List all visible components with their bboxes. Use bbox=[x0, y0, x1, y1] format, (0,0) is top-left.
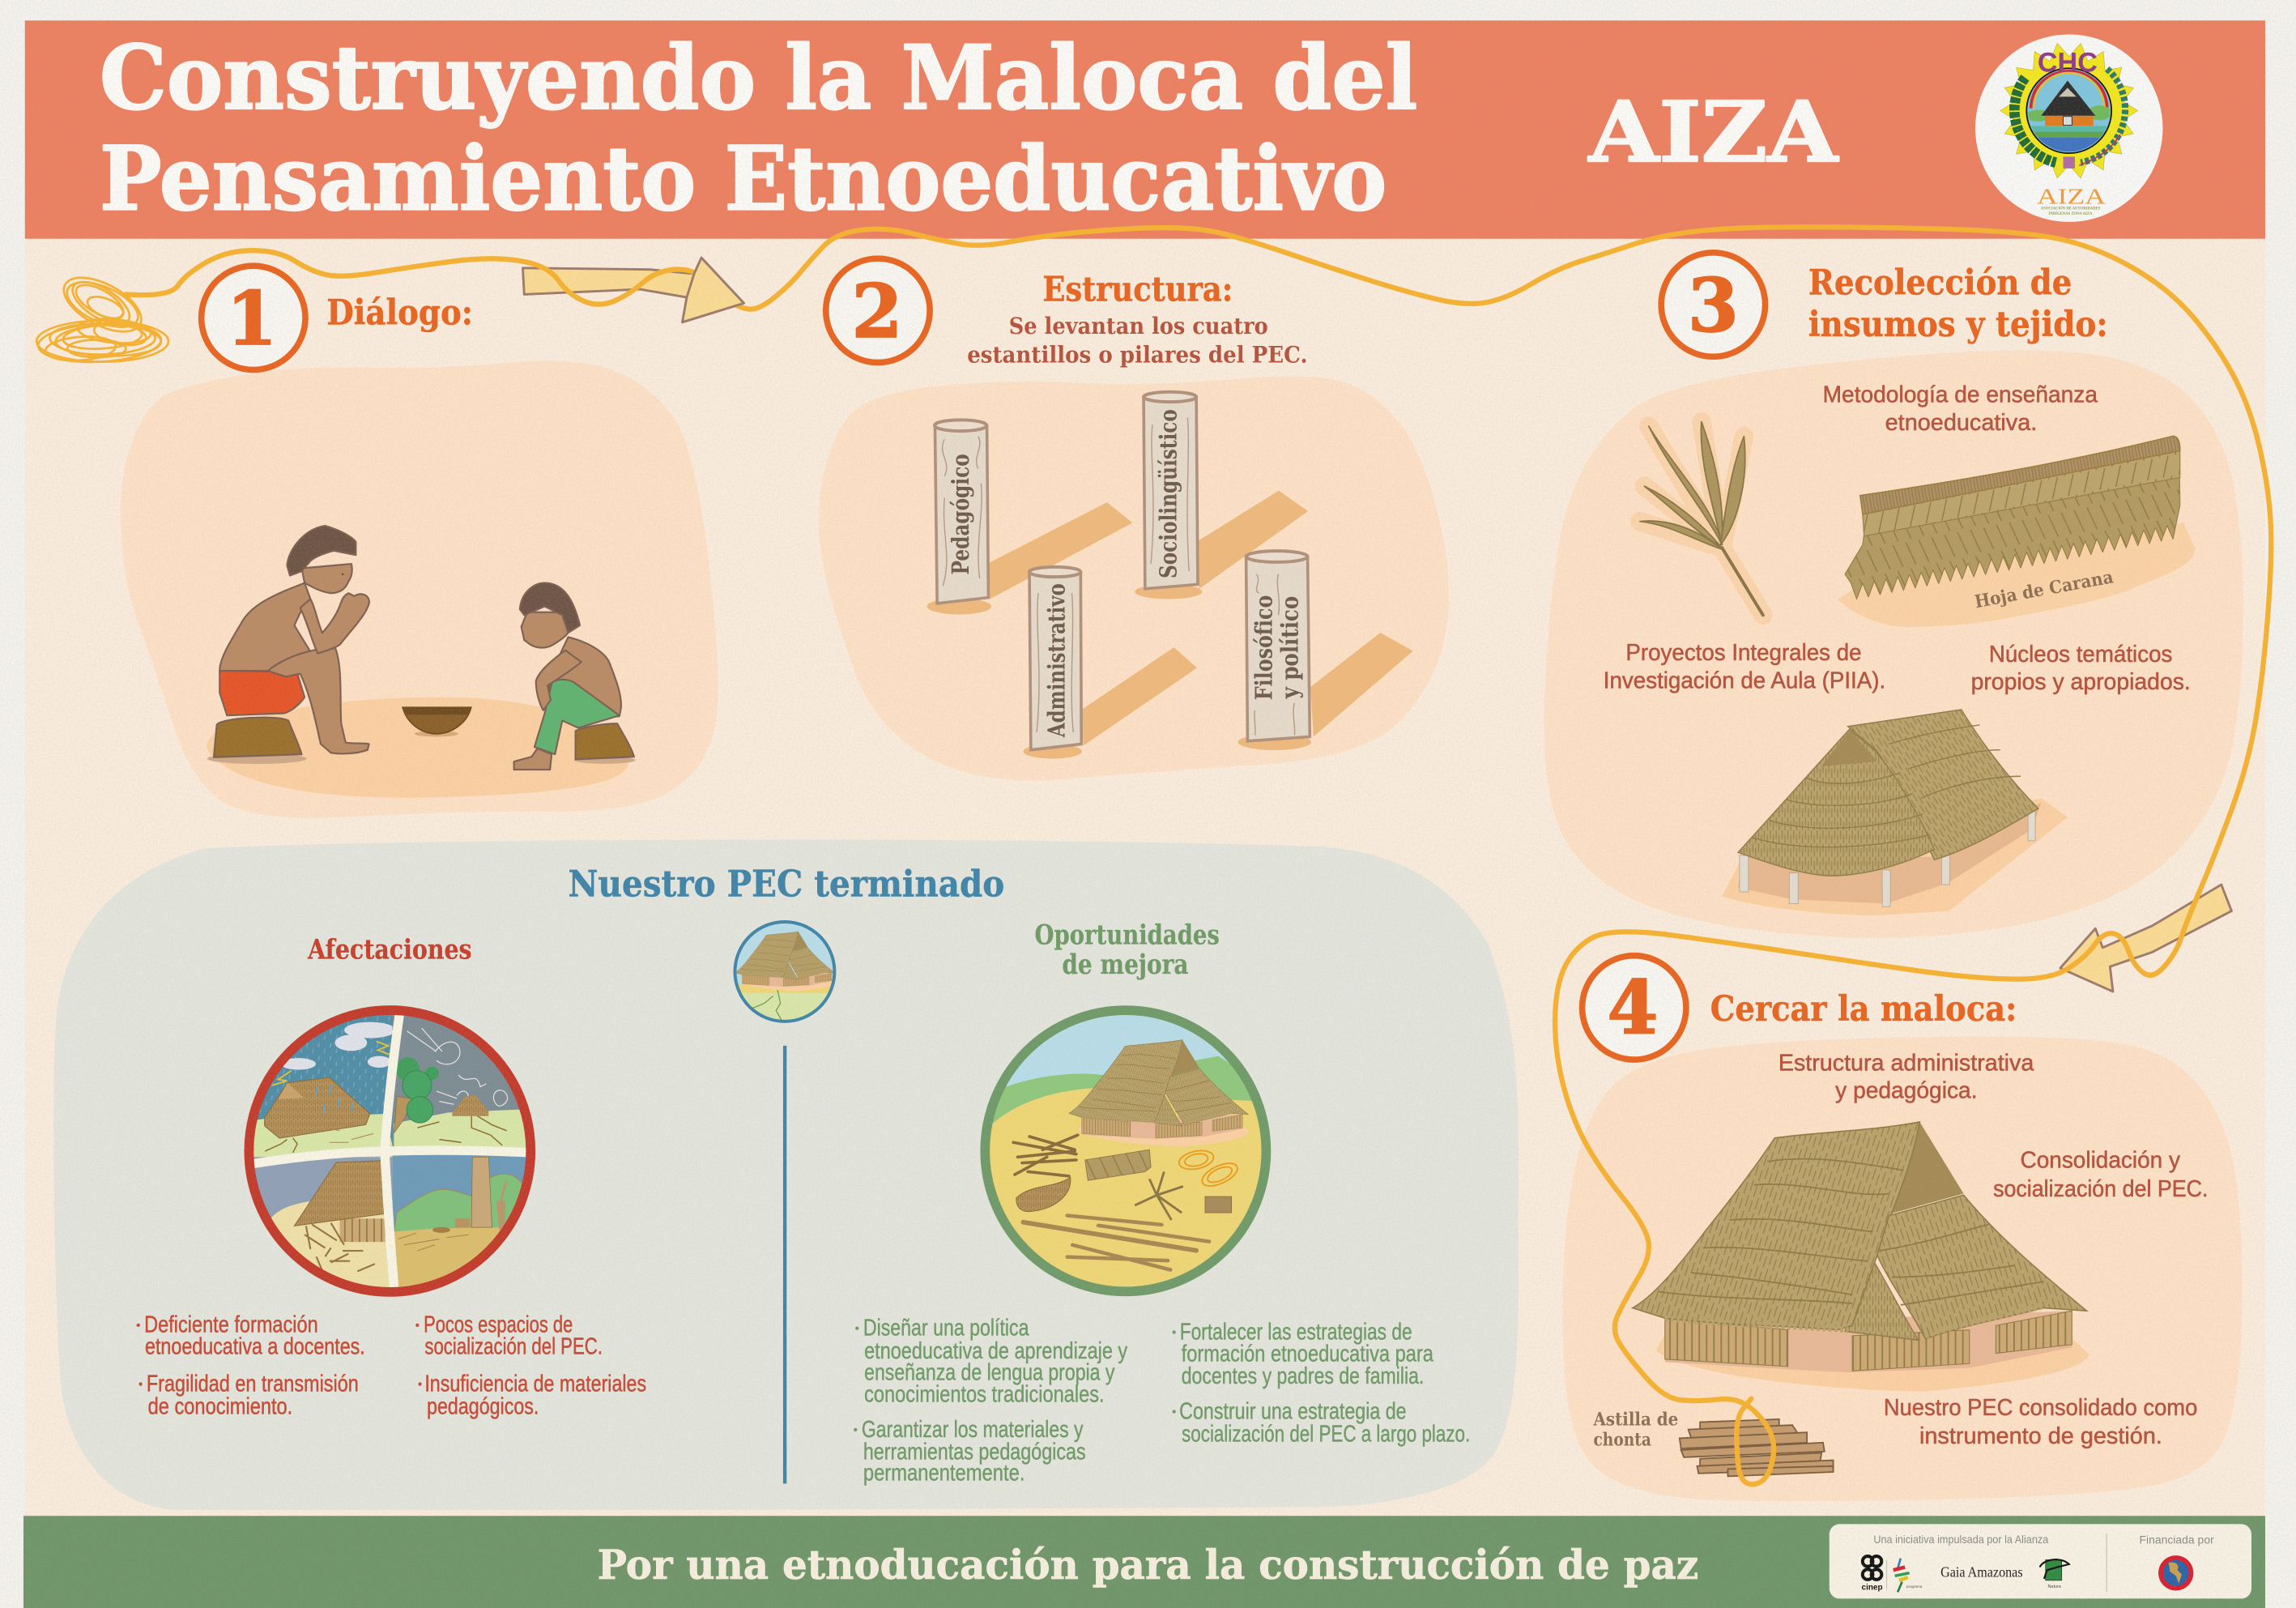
organisation name: AIZA bbox=[1588, 83, 1839, 181]
leaf panel bbox=[1085, 1149, 1151, 1180]
AIZA logo: ASOCIACIÓN DE AUTORIDADES bbox=[2041, 207, 2101, 211]
maloca bbox=[1069, 1040, 1250, 1146]
subheading bbox=[967, 313, 1308, 369]
heading: opportunities: Oportunidades bbox=[1035, 919, 1220, 951]
pillar: Filosófico y político: Filosófico bbox=[1250, 595, 1278, 700]
step 3: gathering and weaving panel bbox=[1544, 253, 2243, 938]
label: integrated projects: Proyectos Integrales de bbox=[1625, 640, 1862, 666]
white cross bbox=[249, 1013, 530, 1289]
label: consolidated PEC: instrumento de gestión. bbox=[1919, 1423, 2162, 1449]
medallion: maloca bbox=[732, 922, 837, 1026]
block bbox=[1205, 1196, 1232, 1213]
first arrow bbox=[522, 258, 743, 322]
panel background bbox=[121, 360, 718, 818]
label: carana leaf: Hoja de Carana bbox=[1973, 567, 2115, 612]
panel background bbox=[53, 839, 1519, 1510]
illustration: opportunities circle bbox=[981, 1008, 1274, 1303]
label: thematic nuclei bbox=[1971, 642, 2191, 695]
list: opportunities left: enseñanza de lengua propia y bbox=[864, 1359, 1115, 1385]
adult figure bbox=[207, 526, 369, 764]
label: integrated projects: Investigación de Aula (PIIA). bbox=[1604, 668, 1885, 694]
panel background bbox=[1544, 351, 2243, 938]
heading: finished PEC: Nuestro PEC terminado bbox=[569, 862, 1004, 905]
step number 3: 3 bbox=[1688, 263, 1739, 349]
step number 1: 1 bbox=[227, 276, 277, 362]
divider bbox=[2106, 1533, 2107, 1592]
quadrant: wind bbox=[392, 1015, 526, 1148]
illustration: effects circle bbox=[241, 1008, 539, 1303]
list: effects left: de conocimiento. bbox=[148, 1393, 292, 1419]
quadrant: broken house bbox=[241, 1157, 393, 1303]
heading: gathering: insumos y tejido: bbox=[1808, 304, 2108, 345]
logo: programa por la paz bbox=[1887, 1559, 1923, 1592]
heading: dialogue: Diálogo: bbox=[326, 292, 473, 333]
step number 4: 4 bbox=[1608, 966, 1658, 1051]
label: consolidation bbox=[1993, 1148, 2208, 1202]
logo: programa por la paz: programa bbox=[1906, 1585, 1923, 1589]
step number 4 bbox=[1582, 956, 1686, 1060]
step 1: dialogue panel bbox=[121, 266, 718, 818]
list: effects right bbox=[415, 1312, 646, 1419]
heading: close the maloca: Cercar la maloca: bbox=[1710, 988, 2017, 1030]
title bbox=[100, 26, 1417, 231]
pillar: Pedagógico bbox=[926, 420, 1132, 614]
list: effects left: Deficiente formación bbox=[144, 1312, 318, 1338]
logo: funder globe bbox=[2158, 1555, 2193, 1590]
list: opportunities right: socialización del PEC a largo plazo. bbox=[1182, 1421, 1470, 1447]
AIZA logo: AIZA bbox=[2037, 184, 2106, 208]
pillar: Filosófico y político: y político bbox=[1276, 596, 1303, 699]
list: opportunities left: conocimientos tradicionales. bbox=[864, 1382, 1105, 1408]
quadrant: rain bbox=[253, 1014, 393, 1157]
label: chonta splinter: Astilla de bbox=[1593, 1410, 1678, 1431]
step number 2: 2 bbox=[852, 269, 902, 355]
title: Construyendo la Maloca del bbox=[100, 26, 1417, 130]
panel background bbox=[1562, 1037, 2242, 1501]
ground bbox=[207, 697, 628, 798]
label: thematic nuclei: propios y apropiados. bbox=[1971, 669, 2191, 695]
label: chonta splinter bbox=[1593, 1410, 1678, 1450]
label: administrative structure: y pedagógica. bbox=[1835, 1077, 1978, 1103]
list: opportunities right: Fortalecer las estrategias de bbox=[1180, 1320, 1412, 1346]
stick pile bbox=[1013, 1135, 1078, 1176]
yarn thread bbox=[126, 227, 2271, 1484]
pillar: Administrativo bbox=[1023, 567, 1197, 759]
heading: effects: Afectaciones bbox=[307, 934, 472, 966]
divider line bbox=[784, 1046, 786, 1484]
list: effects right: Pocos espacios de bbox=[424, 1312, 573, 1338]
list: opportunities left: Garantizar los materiales y bbox=[862, 1417, 1084, 1443]
list: opportunities left bbox=[854, 1316, 1128, 1486]
list: opportunities right: docentes y padres de familia. bbox=[1182, 1363, 1424, 1389]
title: Pensamiento Etnoeducativo bbox=[100, 127, 1387, 231]
panel: our finished PEC bbox=[53, 839, 1519, 1510]
logo: cinep bbox=[1862, 1556, 1883, 1593]
second arrow bbox=[2060, 885, 2231, 992]
step number 1 bbox=[202, 266, 305, 370]
logo: Gaia Amazonas: Gaia Amazonas bbox=[1940, 1563, 2023, 1580]
pillar: Administrativo: Administrativo bbox=[1042, 583, 1070, 738]
list: opportunities right bbox=[1173, 1320, 1470, 1447]
label: administrative structure bbox=[1778, 1051, 2034, 1103]
ground bbox=[981, 1088, 1274, 1303]
hill bbox=[981, 1056, 1274, 1142]
heading: structure: Estructura: bbox=[1042, 270, 1233, 310]
fibre coils bbox=[1178, 1148, 1241, 1191]
list: opportunities left: etnoeducativa de aprendizaje y bbox=[864, 1338, 1128, 1364]
AIZA logo: CHC bbox=[2038, 48, 2098, 79]
label: methodology: etnoeducativa. bbox=[1885, 410, 2037, 436]
list: opportunities right: Construir una estrategia de bbox=[1179, 1399, 1407, 1425]
pillar: Sociolingüístico bbox=[1135, 392, 1308, 599]
logo: Fundación Natura: Natura bbox=[2048, 1585, 2061, 1589]
partners card bbox=[1830, 1524, 2251, 1598]
label: chonta splinter: chonta bbox=[1593, 1429, 1651, 1450]
paper body bbox=[25, 234, 2265, 1523]
pillar: Filosófico y político bbox=[1238, 551, 1413, 750]
list: opportunities left: permanentemente. bbox=[863, 1461, 1024, 1486]
funder caption: Financiada por bbox=[2140, 1533, 2214, 1546]
pillar: Pedagógico: Pedagógico bbox=[947, 454, 974, 574]
step 2: structure panel bbox=[819, 258, 1449, 780]
logo: cinep: cinep bbox=[1862, 1584, 1883, 1593]
list: effects left: etnoeducativa a docentes. bbox=[145, 1333, 365, 1359]
label: methodology bbox=[1823, 382, 2098, 436]
subheading: estantillos o pilares del PEC. bbox=[967, 342, 1308, 369]
leaf bbox=[1135, 1171, 1183, 1220]
panel background bbox=[819, 377, 1449, 780]
list: opportunities left: Diseñar una política bbox=[863, 1316, 1029, 1341]
quadrant: decay bbox=[393, 1154, 539, 1303]
footer band bbox=[23, 1516, 2265, 1608]
footer slogan: Por una etnoducación para la construcción de paz bbox=[598, 1541, 1698, 1589]
maloca frame on posts bbox=[1722, 710, 2068, 915]
first arrow head bbox=[683, 258, 743, 322]
AIZA logo bbox=[1975, 34, 2162, 222]
label: consolidated PEC: Nuestro PEC consolidado como bbox=[1884, 1395, 2197, 1421]
heading: gathering bbox=[1808, 262, 2108, 345]
list: effects left: Fragilidad en transmisión bbox=[147, 1371, 359, 1397]
subheading: Se levantan los cuatro bbox=[1009, 313, 1268, 339]
step number 3 bbox=[1661, 253, 1766, 356]
heading: opportunities: de mejora bbox=[1062, 949, 1189, 980]
list: effects left bbox=[137, 1312, 365, 1419]
basket bbox=[1016, 1178, 1071, 1212]
list: effects right: Insuficiencia de materiales bbox=[424, 1371, 646, 1397]
logo: Fundación Natura bbox=[2040, 1559, 2069, 1589]
list: effects right: socialización del PEC. bbox=[424, 1333, 603, 1359]
icon: palm leaf bbox=[1640, 422, 1763, 615]
alliance caption: Una iniciativa impulsada por la Alianza bbox=[1873, 1533, 2049, 1546]
list: effects right: pedagógicos. bbox=[427, 1393, 539, 1419]
pillar: Sociolingüístico: Sociolingüístico bbox=[1155, 409, 1182, 578]
child figure bbox=[514, 583, 636, 770]
label: methodology: Metodología de enseñanza bbox=[1823, 382, 2098, 407]
label: consolidation: Consolidación y bbox=[2021, 1148, 2180, 1174]
poles bbox=[1023, 1215, 1209, 1270]
bowl bbox=[403, 707, 471, 736]
yarn coil bbox=[36, 267, 168, 365]
label: integrated projects bbox=[1604, 640, 1885, 694]
step 4: closing the maloca panel bbox=[1562, 956, 2242, 1501]
AIZA logo: INDÍGENAS ZONA AIZA bbox=[2049, 211, 2093, 216]
heading: opportunities bbox=[1035, 919, 1220, 980]
icon: chonta bundle bbox=[1680, 1419, 1834, 1476]
label: consolidation: socialización del PEC. bbox=[1993, 1176, 2208, 1202]
label: consolidated PEC bbox=[1884, 1395, 2197, 1449]
list: opportunities right: formación etnoeducativa para bbox=[1182, 1341, 1434, 1367]
label: administrative structure: Estructura administrativa bbox=[1778, 1051, 2034, 1077]
label: thematic nuclei: Núcleos temáticos bbox=[1989, 642, 2172, 668]
list: opportunities left: herramientas pedagógicas bbox=[863, 1439, 1086, 1465]
title banner bbox=[25, 20, 2265, 239]
step number 2 bbox=[826, 258, 930, 362]
icon: woven carana leaf panel bbox=[1838, 436, 2195, 627]
heading: gathering: Recolección de bbox=[1808, 262, 2072, 303]
finished maloca bbox=[1633, 1122, 2089, 1392]
